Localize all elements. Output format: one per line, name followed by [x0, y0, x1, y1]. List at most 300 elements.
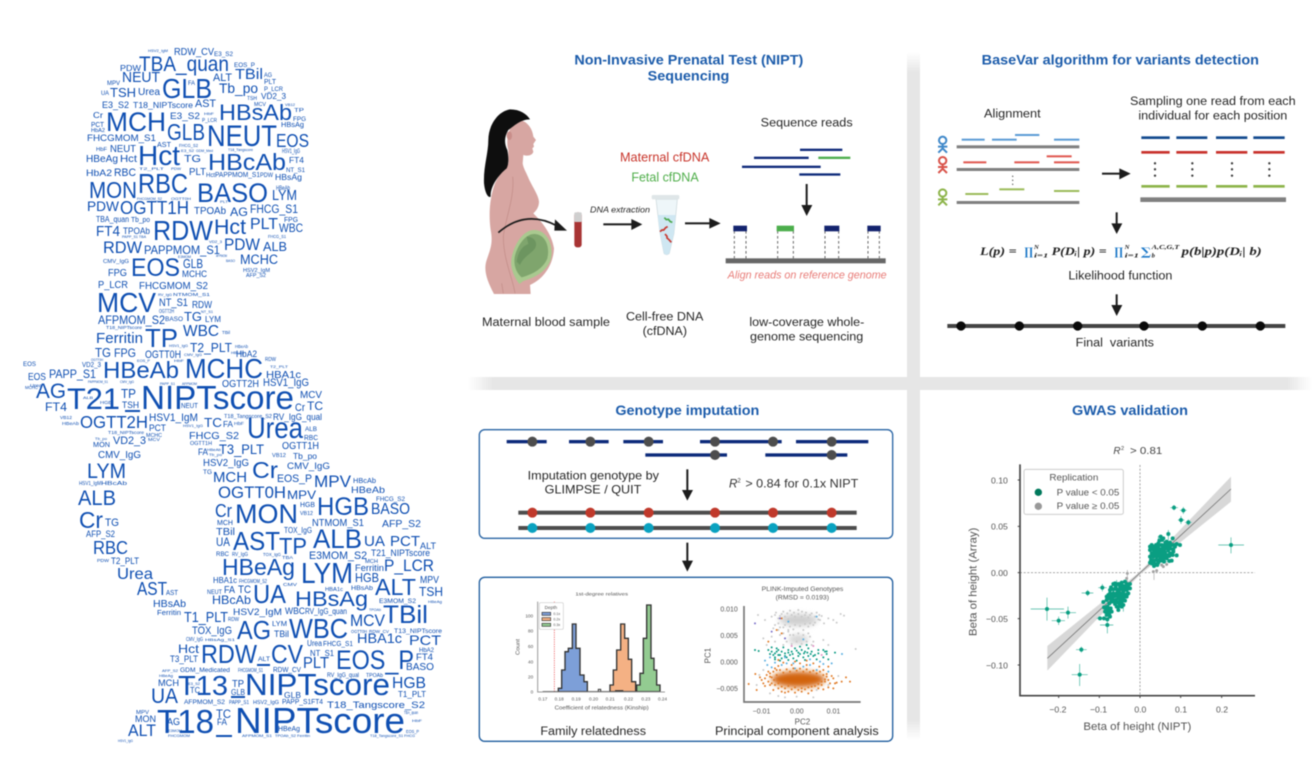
word cloud: pregnant woman silhouette: RBC: [93, 538, 128, 558]
word cloud: pregnant woman silhouette: HBcAb: [353, 478, 376, 485]
word cloud: pregnant woman silhouette: HSV1_IgG: [263, 377, 309, 389]
formula: likelihood: A,C,G,T: [1150, 244, 1180, 251]
word cloud: pregnant woman silhouette: HSV2_IgM: [148, 48, 168, 53]
word cloud: pregnant woman silhouette: T18_NIPTscore: [133, 101, 194, 110]
word cloud: pregnant woman silhouette: MCHC: [146, 433, 162, 439]
word cloud: pregnant woman silhouette: RV_IgG_qual: [273, 412, 322, 423]
caption: align reads: Align reads on reference genome: [727, 269, 887, 281]
word cloud: pregnant woman silhouette: HBeAb: [207, 447, 222, 452]
formula: likelihood: P(Dᵢ| p) =: [1052, 245, 1107, 258]
word cloud: pregnant woman silhouette: NIPTscore: [245, 667, 390, 702]
word cloud: pregnant woman silhouette: MCV: [350, 611, 386, 630]
word cloud: pregnant woman silhouette: RBC: [138, 168, 188, 199]
chart: beta scatter: [986, 464, 1255, 715]
word cloud: pregnant woman silhouette: NEUT: [122, 69, 160, 86]
word cloud: pregnant woman silhouette: NEUT: [207, 590, 222, 596]
word cloud: pregnant woman silhouette: AFP_S2: [162, 668, 179, 673]
word cloud: pregnant woman silhouette: HbA2: [236, 349, 257, 359]
word cloud: pregnant woman silhouette: NT_S1: [286, 168, 306, 174]
arrow: reads down: [801, 184, 812, 216]
word cloud: pregnant woman silhouette: FHCGMOM_S2: [137, 196, 163, 201]
text: R2 accuracy: > 0.84 for 0.1x NIPT: [745, 477, 858, 490]
word cloud: pregnant woman silhouette: T13: [178, 670, 228, 701]
word cloud: pregnant woman silhouette: NIPTscore: [235, 700, 405, 741]
word cloud: pregnant woman silhouette: RDW_CV: [174, 46, 214, 58]
word cloud: pregnant woman silhouette: TBil: [222, 330, 230, 335]
word cloud: pregnant woman silhouette: E3MOM_S2: [379, 598, 416, 605]
word cloud: pregnant woman silhouette: GLB: [231, 688, 245, 697]
text: R2 accuracy: R: [729, 477, 738, 490]
word cloud: pregnant woman silhouette: CMV_IgG: [98, 450, 141, 461]
word cloud: pregnant woman silhouette: ALT: [375, 574, 416, 600]
legend: replication: [1024, 469, 1123, 514]
word cloud: pregnant woman silhouette: T2_PLT: [190, 340, 232, 355]
word cloud: pregnant woman silhouette: PLT: [250, 216, 278, 233]
word cloud: pregnant woman silhouette: GLB: [167, 119, 205, 145]
word cloud: pregnant woman silhouette: T21_NIPTscore: [371, 548, 430, 559]
word cloud: pregnant woman silhouette: MON: [235, 499, 298, 529]
word cloud: pregnant woman silhouette: HBeAg: [278, 726, 300, 733]
chart: kinship histogram: 0.18: [555, 696, 564, 701]
word cloud: pregnant woman silhouette: FHCG_S1: [250, 204, 298, 216]
word cloud: pregnant woman silhouette: PAPP_S1FT4: [282, 699, 323, 706]
formula: likelihood: [979, 244, 1262, 259]
word cloud: pregnant woman silhouette: T2_PLT: [270, 364, 289, 369]
word cloud: pregnant woman silhouette: FPG: [114, 346, 136, 360]
word cloud: pregnant woman silhouette: RDW: [201, 639, 257, 669]
word cloud: pregnant woman silhouette: FHCG_S2: [179, 143, 198, 148]
word cloud: pregnant woman silhouette: CMV_IgG: [186, 637, 203, 643]
word cloud: pregnant woman silhouette: HBA1c: [266, 369, 301, 381]
legend: replication: P value < 0.05: [1057, 487, 1119, 497]
sequence reads lines: [742, 149, 850, 176]
word cloud: pregnant woman silhouette: HBsAb: [351, 586, 374, 592]
word cloud: pregnant woman silhouette: E3_S2: [102, 100, 129, 110]
word cloud: pregnant woman silhouette: Hct: [206, 173, 215, 179]
word cloud: pregnant woman silhouette: LYM: [205, 315, 221, 324]
word cloud: pregnant woman silhouette: GLB: [162, 73, 212, 104]
label: R squared: 2: [1121, 446, 1124, 452]
word cloud: pregnant woman silhouette: UA: [253, 579, 287, 609]
word cloud: pregnant woman silhouette: CMV_IgG: [120, 379, 134, 384]
formula: likelihood: ∏: [1024, 245, 1034, 259]
word cloud: pregnant woman silhouette: FT4: [416, 652, 433, 662]
word cloud: pregnant woman silhouette: PCT: [390, 533, 420, 550]
word cloud: pregnant woman silhouette: RV_IgG: [158, 292, 172, 297]
icon: blood tube: [574, 212, 582, 247]
word cloud: pregnant woman silhouette: RV_IgG: [232, 552, 248, 558]
chart: beta scatter: 0.1: [1175, 705, 1187, 715]
word cloud: pregnant woman silhouette: VB12: [272, 453, 286, 459]
word cloud: pregnant woman silhouette: NEUT: [110, 143, 137, 155]
word cloud: pregnant woman silhouette: Cr: [93, 110, 103, 120]
word cloud: pregnant woman silhouette: HBA1c: [357, 630, 402, 646]
word cloud: pregnant woman silhouette: P_LCR: [202, 118, 217, 124]
chart: kinship histogram: Depth: [545, 605, 558, 610]
word cloud: pregnant woman silhouette: NEUT: [181, 403, 199, 410]
label: cell-free DNA: [626, 310, 704, 338]
chart: PCA scatter: 0.01: [827, 708, 840, 715]
word cloud: pregnant woman silhouette: HBsAg: [295, 588, 368, 611]
word cloud: pregnant woman silhouette: RBC: [304, 435, 318, 442]
word cloud: pregnant woman silhouette: TBil: [274, 629, 289, 640]
word cloud: pregnant woman silhouette: BASO: [226, 258, 235, 263]
word cloud: pregnant woman silhouette: BASO: [197, 178, 268, 208]
arrow: to final variants: [1111, 294, 1122, 316]
word cloud: pregnant woman silhouette: TG: [95, 345, 111, 360]
word cloud: pregnant woman silhouette: AG: [230, 205, 248, 219]
word cloud: pregnant woman silhouette: AFPMOM_S1: [242, 733, 273, 738]
axis label: x: Beta of height (NIPT): [1083, 721, 1191, 733]
word cloud: pregnant woman silhouette: HGB: [392, 675, 426, 692]
chart: beta scatter: 0.2: [1216, 705, 1228, 715]
word cloud: pregnant woman silhouette: OGTT2H: [80, 412, 148, 432]
word cloud: pregnant woman silhouette: E3_S2: [181, 148, 195, 153]
word cloud: pregnant woman silhouette: HSV2_IgM: [243, 268, 270, 274]
word cloud: pregnant woman silhouette: PAPPMOM_S1: [88, 380, 108, 384]
word cloud: pregnant woman silhouette: OGTT0H: [91, 358, 103, 362]
word cloud: pregnant woman silhouette: T3_PLT: [219, 441, 264, 457]
word cloud: pregnant woman silhouette: Cr: [215, 501, 232, 521]
word cloud: pregnant woman silhouette: RDW_CV: [369, 629, 389, 634]
word cloud: pregnant woman silhouette: HBeAb: [62, 421, 80, 426]
arrow: extraction: [603, 219, 642, 230]
chart: kinship histogram: 0.21: [606, 696, 615, 701]
word cloud: pregnant woman silhouette: FPG: [284, 215, 298, 224]
label: family relatedness: Family relatedness: [540, 724, 646, 738]
word cloud: pregnant woman silhouette: AFPMOM_S2: [184, 699, 225, 706]
word cloud: pregnant woman silhouette: MCV: [300, 390, 322, 401]
word cloud: pregnant woman silhouette: LYM: [272, 188, 297, 204]
word cloud: pregnant woman silhouette: AG: [237, 615, 271, 645]
chart: beta scatter: −0.05: [986, 614, 1008, 624]
word cloud: pregnant woman silhouette: OGTT1H: [190, 441, 212, 447]
word cloud: pregnant woman silhouette: T1_PLT: [184, 609, 228, 626]
word cloud: pregnant woman silhouette: MCV: [148, 437, 160, 442]
word cloud: pregnant woman silhouette: BASO: [371, 501, 410, 518]
word cloud: pregnant woman silhouette: OGTT0H: [218, 484, 286, 502]
word cloud: pregnant woman silhouette: HbF: [174, 358, 185, 363]
formula: likelihood: i=1: [1034, 252, 1048, 259]
word cloud: pregnant woman silhouette: FPG: [108, 268, 127, 279]
chart: kinship histogram: 0.1x: [553, 612, 560, 616]
word cloud: pregnant woman silhouette: Tb_po: [95, 437, 107, 441]
word cloud: pregnant woman silhouette: E3MOM_S2: [309, 550, 367, 562]
chart: kinship histogram: 0.2x: [553, 617, 560, 621]
word cloud: pregnant woman silhouette: EOS_P: [406, 729, 419, 734]
chart: kinship histogram: 40: [528, 659, 534, 664]
word cloud: pregnant woman silhouette: HBeAg: [86, 154, 118, 165]
word cloud: pregnant woman silhouette: TC: [307, 399, 323, 413]
formula: likelihood: ∏: [1114, 245, 1124, 259]
word cloud: pregnant woman silhouette: NEUT: [207, 120, 277, 153]
word cloud: pregnant woman silhouette: AG: [167, 716, 180, 728]
word cloud: pregnant woman silhouette: TSH: [110, 85, 136, 100]
chart: PCA scatter: [704, 587, 861, 727]
word cloud: pregnant woman silhouette: PCT: [91, 122, 105, 129]
word cloud: pregnant woman silhouette: OGTT1H: [282, 441, 319, 452]
word cloud: pregnant woman silhouette: TPOAb: [366, 673, 383, 679]
word cloud: pregnant woman silhouette: HGB: [355, 571, 379, 585]
word cloud: pregnant woman silhouette: GDM_Med: [196, 148, 213, 153]
word cloud: pregnant woman silhouette: PAPP_S1: [49, 369, 96, 381]
word cloud: pregnant woman silhouette: TBil: [235, 66, 263, 83]
word cloud: pregnant woman silhouette: Urea: [117, 566, 153, 583]
label: fetal cfDNA: Fetal cfDNA: [631, 171, 699, 185]
word cloud: pregnant woman silhouette: HSV2_IgM: [233, 607, 282, 618]
word cloud: pregnant woman silhouette: E3_S2: [170, 111, 200, 122]
word cloud: pregnant woman silhouette: E3MOM: [168, 729, 182, 733]
formula: likelihood: L(p) =: [979, 245, 1017, 258]
word cloud: pregnant woman silhouette: TBA_quan: [96, 215, 129, 224]
word cloud: pregnant woman silhouette: FHCGMOM_S2: [139, 281, 208, 292]
word cloud: pregnant woman silhouette: FHCG_S2: [189, 430, 239, 442]
word cloud: pregnant woman silhouette: HSV1_IgM: [149, 412, 198, 424]
word cloud: pregnant woman silhouette: CMV: [283, 582, 297, 587]
word cloud: pregnant woman silhouette: FA: [217, 717, 227, 727]
word cloud: pregnant woman silhouette: MON: [135, 714, 156, 725]
word cloud: pregnant woman silhouette: FHCGMOM_S2: [239, 579, 267, 585]
panel: NIPT sequencing: [482, 51, 887, 343]
word cloud: pregnant woman silhouette: RBC: [114, 167, 136, 179]
final variants track: [947, 321, 1285, 331]
chart: PCA scatter: 0.000: [720, 659, 738, 666]
word cloud: pregnant woman silhouette: FT4: [96, 223, 120, 240]
word cloud: pregnant woman silhouette: TBil: [383, 601, 428, 629]
word cloud: pregnant woman silhouette: TSH: [247, 96, 257, 102]
word cloud: pregnant woman silhouette: AST: [157, 140, 171, 149]
word cloud: pregnant woman silhouette: FHCGMOM_S1: [87, 133, 156, 144]
word cloud: pregnant woman silhouette: Tb_po: [219, 80, 258, 96]
word cloud: pregnant woman silhouette: MPV: [287, 488, 316, 502]
word cloud: pregnant woman silhouette: HSV1_IgG: [169, 343, 188, 348]
word cloud: pregnant woman silhouette: MON: [93, 440, 110, 449]
panel: BaseVar algorithm: [938, 52, 1296, 350]
heading: BaseVar: BaseVar algorithm for variants detection: [982, 52, 1259, 67]
word cloud: pregnant woman silhouette: FHCG_S2: [376, 497, 406, 503]
word cloud: pregnant woman silhouette: PDW: [87, 198, 120, 214]
word cloud: pregnant woman silhouette: MCV: [254, 102, 267, 108]
legend: replication: Replication: [1049, 473, 1098, 483]
chart: beta scatter: 0.05: [991, 522, 1008, 532]
word cloud: pregnant woman silhouette: ALB: [78, 487, 116, 510]
word cloud: pregnant woman silhouette: LYM: [87, 460, 126, 483]
word cloud: pregnant woman silhouette: TP: [232, 678, 244, 690]
word cloud: pregnant woman silhouette: PLT: [264, 79, 277, 86]
chart: kinship histogram: [515, 592, 667, 712]
word cloud: pregnant woman silhouette: FHCG_S1: [323, 641, 353, 648]
label: final variants: Final variants: [1076, 336, 1154, 350]
word cloud: pregnant woman silhouette: RV_IgG_qual: [327, 673, 359, 679]
word cloud: pregnant woman silhouette: FHCG_S1: [268, 234, 286, 239]
word cloud: pregnant woman silhouette: AG: [36, 380, 66, 403]
word cloud: pregnant woman silhouette: RDW_CV: [273, 665, 301, 674]
word cloud: pregnant woman silhouette: MPV: [314, 472, 352, 491]
word cloud: pregnant woman silhouette: HBeAb: [103, 357, 179, 383]
icon: microtube: [652, 195, 679, 255]
word cloud: pregnant woman silhouette: Urea: [30, 383, 43, 388]
word cloud: pregnant woman silhouette: T2_PLT: [111, 556, 139, 566]
word cloud: pregnant woman silhouette: HBeAb: [351, 485, 385, 496]
word cloud: pregnant woman silhouette: PCT: [409, 632, 442, 648]
word cloud: pregnant woman silhouette: TBA_quan: [404, 710, 418, 715]
word cloud: pregnant woman silhouette: FA: [188, 81, 195, 87]
word cloud: pregnant woman silhouette: GLB: [284, 691, 301, 700]
word cloud: pregnant woman silhouette: Ferritin: [96, 331, 143, 347]
word cloud: pregnant woman silhouette: WBC: [285, 606, 305, 616]
icons: individuals: [938, 137, 947, 205]
word cloud: pregnant woman silhouette: FT4: [45, 400, 67, 414]
word cloud: pregnant woman silhouette: GDM_Medicated: [180, 667, 230, 674]
word cloud: pregnant woman silhouette: NT_S1: [310, 649, 335, 658]
word cloud: pregnant woman silhouette: FA: [198, 447, 208, 457]
panel: genotype imputation: [479, 403, 893, 572]
word cloud: pregnant woman silhouette: Urea: [247, 412, 303, 445]
word cloud: pregnant woman silhouette: TC: [216, 707, 231, 721]
word cloud: pregnant woman silhouette: MPV: [136, 710, 150, 716]
word cloud: pregnant woman silhouette: LYM: [301, 558, 353, 590]
word cloud: pregnant woman silhouette: NT_S1: [201, 309, 214, 314]
word cloud: pregnant woman silhouette: AFPMOM: [182, 382, 197, 386]
text: imputation method: GLIMPSE / QUIT: [545, 484, 641, 497]
word cloud: pregnant woman silhouette: EOS_P: [277, 473, 312, 485]
word cloud: pregnant woman silhouette: TC: [238, 584, 251, 596]
chart: kinship histogram: Coefficient of relatedness (Kinship): [555, 706, 649, 712]
chart: kinship histogram: 1st-degree relatives: [575, 592, 629, 598]
arrow: to alignment: [685, 218, 721, 229]
word cloud: pregnant woman silhouette: HSV1_IgG: [282, 149, 300, 155]
word cloud: pregnant woman silhouette: ALB: [83, 395, 93, 400]
word cloud: pregnant woman silhouette: BASO: [406, 662, 434, 673]
word cloud: pregnant woman silhouette: T3_PLT: [170, 654, 198, 664]
word cloud: pregnant woman silhouette: HbA2: [419, 648, 435, 654]
word cloud: pregnant woman silhouette: TBil: [216, 527, 235, 538]
chart: beta scatter: 0.0: [1134, 705, 1147, 715]
word cloud: pregnant woman silhouette: HSV1_IgM: [79, 481, 101, 487]
word cloud: pregnant woman silhouette: MCH: [213, 470, 247, 486]
word cloud: pregnant woman silhouette: VB12: [285, 102, 296, 107]
word cloud: pregnant woman silhouette: ALB: [263, 239, 287, 254]
word cloud: pregnant woman silhouette: TG: [203, 470, 212, 476]
word cloud: pregnant woman silhouette: NT_S1: [159, 297, 188, 309]
chart: beta scatter: 0.10: [991, 475, 1008, 485]
word cloud: pregnant woman silhouette: FPG: [293, 117, 306, 123]
word cloud: pregnant woman silhouette: EOS: [276, 130, 309, 151]
word cloud: pregnant woman silhouette: HBsAg: [275, 172, 302, 182]
word cloud: pregnant woman silhouette: HBA1c: [325, 587, 344, 593]
label: sampling: individual for each position: [1138, 108, 1287, 122]
chart: PCA scatter: 0.00: [790, 708, 804, 715]
word cloud: pregnant woman silhouette: OGTT2H: [159, 309, 174, 315]
word cloud: pregnant woman silhouette: HBsAg_S1: [205, 637, 236, 642]
word cloud: pregnant woman silhouette: Urea: [138, 86, 160, 98]
word cloud: pregnant woman silhouette: HBsAg: [231, 350, 244, 355]
word cloud: pregnant woman silhouette: PAPPMOM_S1: [215, 172, 260, 179]
chart: kinship histogram: 0.24: [658, 696, 667, 701]
word cloud: pregnant woman silhouette: TPOAb: [123, 226, 150, 236]
word cloud: pregnant woman silhouette: HBcAb: [101, 481, 127, 487]
box: downstream: [479, 577, 893, 741]
icon: pregnant woman: [484, 109, 554, 294]
word cloud: pregnant woman silhouette: MON: [89, 177, 137, 203]
word cloud: pregnant woman silhouette: EOS_P: [336, 645, 414, 675]
word cloud: pregnant woman silhouette: PDW: [224, 235, 260, 254]
word cloud: pregnant woman silhouette: FHCGMOM_S1: [238, 668, 263, 674]
chart: kinship histogram: 0.3x: [553, 623, 560, 627]
word cloud: pregnant woman silhouette: HBcAb: [212, 593, 251, 607]
arrow: to likelihood: [1111, 212, 1122, 234]
word cloud: pregnant woman silhouette: Urea: [307, 639, 322, 648]
word cloud: pregnant woman silhouette: MCH: [365, 559, 378, 565]
word cloud: pregnant woman silhouette: TOX_IgG: [284, 526, 312, 535]
chart: PCA scatter: PC2: [795, 718, 811, 727]
word cloud: pregnant woman silhouette: HBeAg: [428, 599, 442, 604]
label: sampling: [1130, 94, 1296, 122]
word cloud: pregnant woman silhouette: MCHC: [185, 353, 263, 384]
word cloud: pregnant woman silhouette: HBsAb: [219, 100, 292, 125]
word cloud: pregnant woman silhouette: EOS_P: [234, 63, 255, 69]
word cloud: pregnant woman silhouette: CMV_IgG: [287, 461, 330, 472]
formula: likelihood: N: [1124, 244, 1130, 251]
word cloud: pregnant woman silhouette: TSH: [122, 400, 139, 410]
heading: NIPT sequencing: [574, 51, 803, 84]
word cloud: pregnant woman silhouette: TC: [204, 415, 222, 430]
haplotype reads: [507, 437, 868, 460]
chart: PCA scatter: −0.01: [753, 708, 770, 715]
word cloud: pregnant woman silhouette: OGTT0H: [351, 629, 367, 634]
word cloud: pregnant woman silhouette: E3MOM: [178, 254, 191, 259]
word cloud: pregnant woman silhouette: CV: [271, 639, 304, 669]
word cloud: pregnant woman silhouette: Hct: [138, 140, 180, 171]
word cloud: pregnant woman silhouette: MCHC: [240, 252, 278, 267]
formula: likelihood: i=1: [1125, 252, 1139, 259]
text: imputation method: [528, 470, 659, 497]
word cloud: pregnant woman silhouette: PDW: [260, 173, 273, 179]
word cloud: pregnant woman silhouette: Tb_po: [293, 451, 317, 461]
word cloud: pregnant woman silhouette: AST: [166, 590, 179, 597]
word cloud: pregnant woman silhouette: RDW: [153, 215, 214, 246]
chart: kinship histogram: 0.20: [589, 696, 598, 701]
alignment tracks: [957, 134, 1079, 204]
arrow: sample to tube: [498, 219, 567, 233]
word cloud: pregnant woman silhouette: TPOAb: [369, 608, 381, 612]
word cloud: pregnant woman silhouette: EOS: [28, 372, 46, 383]
chart: beta scatter: −0.10: [986, 660, 1008, 670]
word cloud: pregnant woman silhouette: E3_S2: [214, 52, 234, 58]
word cloud: pregnant woman silhouette: FT4: [289, 156, 305, 165]
label: R squared: > 0.81: [1130, 446, 1163, 457]
word cloud: pregnant woman silhouette: OGTT0H: [145, 349, 181, 361]
word cloud: pregnant woman silhouette: P_LCR: [264, 86, 283, 93]
aligned reads on reference genome: [726, 226, 886, 263]
arrow: imputation: [682, 469, 693, 501]
word cloud: pregnant woman silhouette: WBC: [289, 613, 348, 644]
word cloud: pregnant woman silhouette: NTMOM_S1: [173, 292, 211, 297]
word cloud: pregnant woman silhouette: MCH: [217, 520, 233, 527]
word cloud: pregnant woman silhouette: TBA: [282, 555, 293, 560]
word cloud: pregnant woman silhouette: ALT: [213, 72, 232, 84]
word cloud: pregnant woman silhouette: P_LCR: [98, 279, 128, 291]
word cloud: pregnant woman silhouette: MPV: [420, 575, 439, 586]
label: low-coverage sequencing: genome sequencing: [750, 329, 863, 343]
word cloud: pregnant woman silhouette: NTMOM_S1: [312, 518, 364, 529]
word cloud: pregnant woman silhouette: PDW: [171, 166, 181, 171]
word cloud: pregnant woman silhouette: TBA_quan: [139, 53, 229, 76]
word cloud: pregnant woman silhouette: HGB: [300, 502, 315, 509]
word cloud: pregnant woman silhouette: TP: [121, 386, 136, 401]
word cloud: pregnant woman silhouette: TOX_IgG: [192, 625, 232, 637]
heading: NIPT sequencing: Non-Invasive Prenatal Test (NIPT): [574, 51, 803, 67]
